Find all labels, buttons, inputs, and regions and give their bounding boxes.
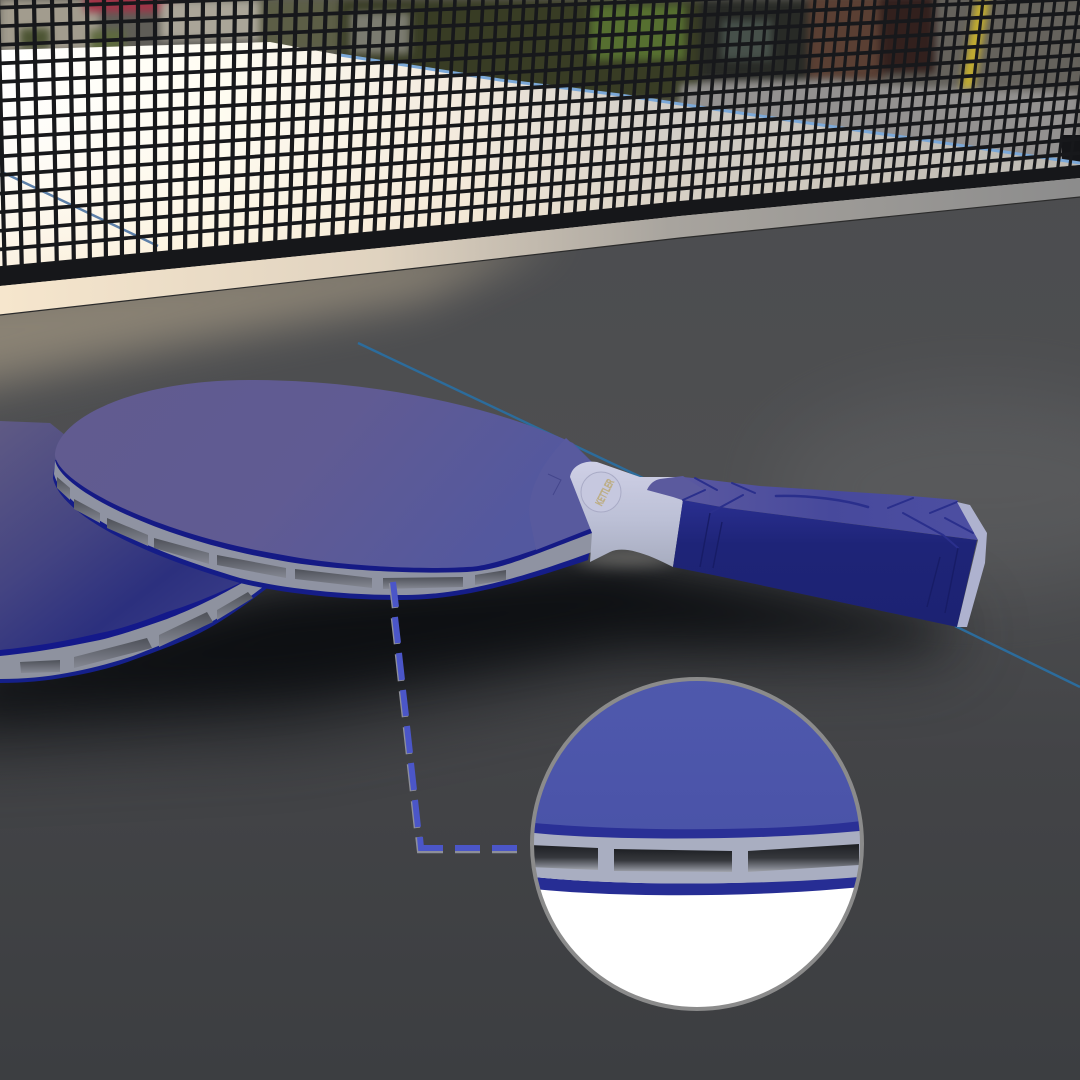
handle end cap [957,502,987,627]
blurred background scene behind net [0,0,1080,180]
logo badge [581,472,621,512]
blade ventilation slots [57,477,506,589]
back paddle [0,421,270,683]
net post beam [0,178,1080,315]
net mesh [0,0,1080,280]
blue centre line on table [358,343,1080,687]
inset ring [532,679,862,1009]
back paddle slots [20,592,253,673]
back paddle face [0,470,250,656]
net bottom band [0,165,1080,286]
white throat collar [570,462,683,567]
inset white background [538,877,854,1007]
grip side seams [700,513,958,613]
inset slots [530,844,859,872]
blade rubber face [55,380,600,568]
throat wedge [529,438,600,550]
blade grey side [54,460,600,595]
dashed callout line [392,582,517,850]
magnified detail circle [525,677,870,1011]
handle grip side [673,500,977,627]
blade top rim [55,400,600,573]
back paddle body [0,560,270,683]
logo text: KETTLER [594,477,617,508]
blade underside rim [53,460,600,600]
handle grip top [683,477,978,540]
inset top rim band [534,822,860,838]
inset rubber face [530,677,864,837]
inset grey body [525,830,870,884]
bright table top behind net [0,42,1080,290]
inset lower blue band [538,877,857,896]
wedge mark [548,474,561,495]
grip grooves [683,478,973,548]
main paddle [53,380,987,627]
purple neck patch [647,476,705,500]
